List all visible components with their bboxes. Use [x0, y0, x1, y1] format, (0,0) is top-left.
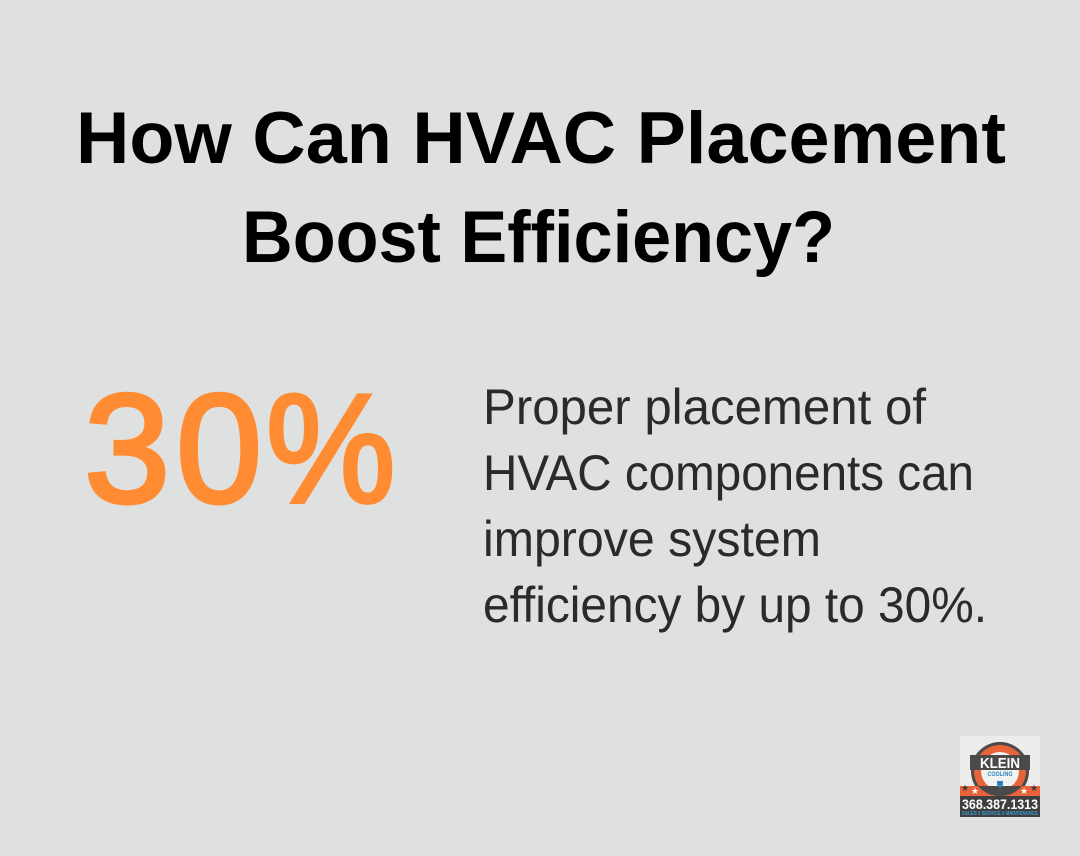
big stat: 30%: 30: [84, 362, 262, 535]
description text: efficiency by up to 30%.: [483, 577, 987, 633]
logo stars: ★: [961, 783, 969, 793]
description text: HVAC components can: [483, 445, 974, 501]
description text: [483, 379, 987, 633]
logo badge ring: [971, 742, 1029, 800]
logo phone panel: [960, 796, 1040, 817]
description text: Proper placement of: [483, 379, 926, 435]
title: Boost Efficiency?: [242, 197, 835, 278]
logo: Klein Cooling badge: KLEIN: [980, 755, 1020, 772]
logo: Klein Cooling badge: [960, 736, 1040, 817]
logo stars: ★: [1030, 783, 1038, 793]
logo stars: ★: [971, 786, 979, 796]
logo services line: SALES // SERVICE // MAINTENANCE: [962, 811, 1039, 817]
title: How Can HVAC Placement: [76, 98, 1006, 179]
big stat: 30%: [84, 362, 396, 535]
logo sub-name: COOLING: [988, 772, 1013, 778]
logo stars: [961, 783, 1038, 796]
logo: Klein Cooling badge: 368.387.1313: [962, 796, 1038, 812]
logo name banner: [970, 755, 1030, 770]
title: [76, 98, 1006, 278]
logo orange ribbon: [960, 786, 1040, 796]
logo stars: ★: [1020, 786, 1028, 796]
big stat: 30%: %: [266, 362, 396, 535]
description text: improve system: [483, 511, 821, 567]
